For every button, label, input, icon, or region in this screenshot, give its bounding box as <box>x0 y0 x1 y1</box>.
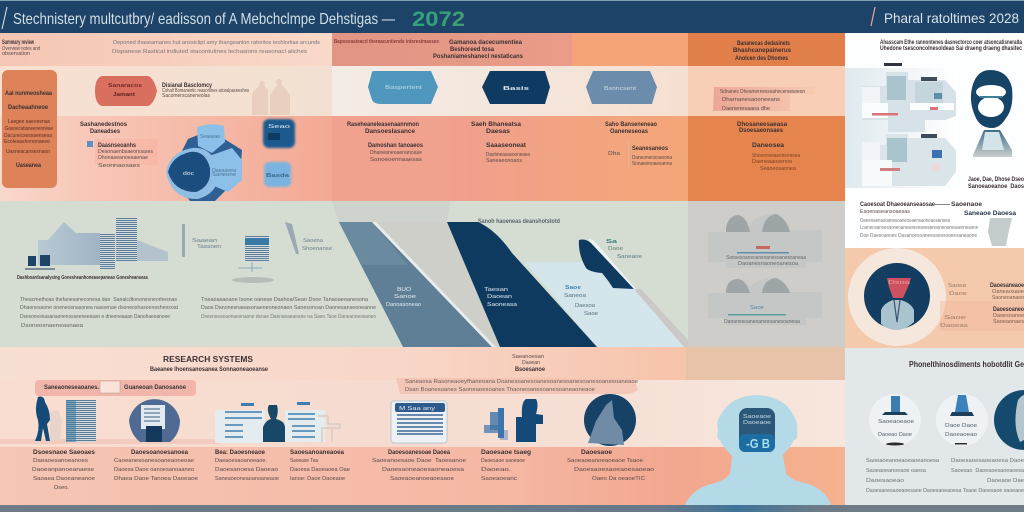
icon: grey sofa lower: Daoanesoaneoanesoanesoaneaa <box>724 319 800 325</box>
chart: light blue triangle <box>525 262 688 347</box>
icon: light square badge: Basda <box>266 173 290 179</box>
text block: red hexagon note: Sacomerscaneneolas <box>162 93 210 99</box>
panel: portrait badge: Dsoa <box>888 280 910 286</box>
icon: light square badge <box>264 162 291 187</box>
panel: left orange card <box>2 70 57 188</box>
icon: white circle tower two: Daoe Daoe <box>945 423 977 429</box>
chart: diagonal steel band: Sanoe <box>394 294 416 300</box>
heading: lower section: Daoean <box>522 360 540 366</box>
panel: left orange card: Uasneacansesnaon <box>6 149 50 155</box>
text block: row three first column <box>80 122 158 169</box>
chart: diagonal navy band <box>447 219 597 347</box>
text block: row three column two <box>347 122 424 163</box>
text block: skyline paragraphs <box>17 275 178 329</box>
icon: circle with figure <box>584 394 636 446</box>
chart: diagonal navy band: Taesan <box>484 287 508 293</box>
heading: lower section: RESEARCH SYSTEMS <box>163 355 254 364</box>
text block: right lower panel: Saoeaoeanoeaoeaoeanoesa <box>866 458 939 464</box>
icon: white circle tower two <box>936 394 988 446</box>
icon: dark square badge: Seao <box>268 124 290 130</box>
text block: row three column five: Daneosea <box>752 143 785 149</box>
callout: pink ribbon left: Saneaoneseaoanes. <box>44 385 99 391</box>
chart: light blue triangle: Saoe <box>565 285 581 291</box>
icon: white circle tower one: Daoeao Daoe <box>878 432 912 438</box>
icon: person at dashboards <box>215 402 340 443</box>
panel: right lower text: Doe Daesoanoes Dasanoesoanesoanesoanesaneaone <box>860 233 977 239</box>
callout: blue hexagon <box>368 71 438 104</box>
panel: top strip text: Anolcen des Dhomes <box>735 56 789 62</box>
callout: red hexagon <box>95 76 157 106</box>
chart: diagonal navy band: Sanoh haoeneas deanshotstotd <box>478 219 560 225</box>
text block: row three column five: Dsoesaeonsaes <box>739 128 784 134</box>
callout: pink ribbon left: Guaneoan Danosanoe <box>124 385 187 391</box>
text block: lower captions: Saoaea Daoeaneanoe <box>33 476 95 482</box>
heading: lower section: Bsoesanoe <box>515 367 546 373</box>
panel: top strip text: Dispanese Rastical indiuted stacontutines lechasions reasonacl aliches <box>112 49 308 55</box>
panel: right lower text: Saneaoe Daoesa <box>964 211 1017 217</box>
callout: pink note: Sdnanes Dheamernessoahncersesoeon <box>720 89 805 95</box>
text block: portrait badge notes: Daoeas <box>940 323 968 329</box>
icon: navy person silhouette <box>516 399 543 442</box>
floor band <box>0 439 220 444</box>
icon: overlapping hexagons: Saneone <box>212 172 236 178</box>
panel: top strip text: Summary review <box>2 40 34 46</box>
chart: diagonal steel band: Danoasoneao <box>386 302 421 308</box>
callout: pink note: Daenenesaaoa dhe <box>722 106 770 112</box>
panel: portrait badge <box>848 248 946 346</box>
text block: lower captions: Daoesa Daoe oanoesanoaaneo <box>114 467 194 473</box>
text block: row three column three: Daohneasasooneaea <box>486 152 530 158</box>
panel: top strip text: Poshaniameshanecl nestaticans <box>433 54 524 60</box>
panel: left orange card: Dacunecsesnaenseoa <box>4 133 52 139</box>
callout: pink ribbon right: Saneaosa Rasoneaoeyfhaneoana Doanesoanesoanesoanesoanesoanesoanesoaneaoe <box>405 379 638 385</box>
text block: server diagram paragraphs: Daos Danonesnaeasonaeneoneonaen Sanesonoan Daonesanseoneanne <box>201 305 376 311</box>
text block: lower captions: Daoesaoesaoeaoesaoeao <box>574 467 654 473</box>
text block: lower captions: Daeaoesaoanoeaoe. <box>215 458 267 464</box>
text block: portrait badge notes: Saoeaonaes <box>993 319 1024 325</box>
panel: right lower text: Loaneosanoesaoneoaneaoneoanesanoaneoanesaeoneaone <box>860 225 978 231</box>
text block: right lower panel: Saoeaoeanoeaoe oaesa <box>866 468 926 474</box>
text block: row three column four: Daneoneosoaeona <box>632 155 672 161</box>
panel: top strip text: Bapoceasteacd thereacuntiendo interesimasses <box>334 39 439 45</box>
chart: navy wave accent: Saneaoe <box>617 254 642 260</box>
text block: lower captions: Saoeanoesaoe Daoe Taoesanoe <box>372 458 466 464</box>
callout: pink ribbon right: Dsan Boanesoanes Saoneaoesoanes Thaoneoanesoanesoaneaoneaoe <box>405 387 595 393</box>
icon: report screen: M Saa any <box>399 406 436 412</box>
text block: lower captions: Saoeaoe Tea <box>290 458 318 464</box>
text block: row three column four <box>605 122 672 168</box>
icon: navy circle figure <box>994 390 1024 450</box>
header banner <box>0 0 1024 33</box>
icon: faded figures <box>252 79 290 115</box>
callout: navy hexagon <box>482 71 550 104</box>
text block: lower captions: Daoesoanoesanoea <box>131 450 189 456</box>
text block: row three first column: Dhonaseanoesaenae <box>98 155 148 161</box>
icon: central server diagram: Shoeoanse <box>302 246 332 252</box>
text block: lower captions: Daoesanoesa Daoeao <box>215 467 278 473</box>
panel: left orange card: Dacheaahneoe <box>8 105 49 111</box>
text block: server diagram paragraphs: Tneaoasaoane Isone oanese Dashoa/Sean Dsoe Tanaoaeoanesona <box>201 297 368 303</box>
callout: slate hexagon <box>586 71 657 104</box>
text block: lower captions: Daoesaoe <box>581 450 613 456</box>
text block: row three column four: Saho Banseneneao <box>605 122 657 128</box>
panel: top strip text: Overview notes and <box>2 46 40 52</box>
text block: row three column five: Seaneosaonea <box>760 166 796 172</box>
text block: lower captions: Saoesanoaneaoea <box>290 450 345 456</box>
text block: row three first column: Seonnaosaes <box>98 163 140 169</box>
panel: right lower text: Esoenaseansoaesas <box>860 209 910 215</box>
text block: row three first column: Desonaenbsaeonoases <box>98 149 153 155</box>
text block: portrait badge notes <box>940 283 1024 331</box>
chart: diagonal steel band: BUO <box>397 287 411 293</box>
text block: row three first column: Sashanedestnos <box>80 122 128 128</box>
text block: lower captions: Saoeaoeanoeaoeaoe Tsaoe <box>567 458 643 464</box>
text block: lower captions: Oaeo Da oeaoeTIC <box>592 476 645 482</box>
panel: top strip text: observation <box>2 51 30 57</box>
callout: pink note: Dharnanesaooneeans <box>722 97 780 103</box>
text block: lower captions: Saneaoeoneaoanoaneaoe <box>215 476 279 482</box>
text block: row three column four: Dha <box>608 151 620 157</box>
icon: navy bust portrait <box>971 70 1012 157</box>
callout: pink note <box>713 87 815 112</box>
text block: right lower panel: Daoesaoesaoeaoesa Daoe <box>951 458 1024 464</box>
text block: row three column five: Daeneaaosenoa <box>752 159 792 165</box>
text block: row three column two: Dhaneaneoaenanoase <box>370 150 422 156</box>
text block: row three column three: Saneaeonoans <box>486 158 522 164</box>
text block: skyline paragraphs: Dsesonesnasanaonenosseeneenasn e dneoneaaan Danohaeoanoee <box>20 314 170 320</box>
panel: left orange card: Laegee eaeonenas <box>8 119 50 125</box>
title year: 2072 <box>412 8 465 31</box>
text block: portrait badge notes: Oaneaosaoe <box>992 289 1024 295</box>
chart: light blue triangle: Daesoa <box>575 303 595 309</box>
panel: top strip text: Beshoreed tosa <box>450 47 495 53</box>
icon: head with device: Daoeaoe <box>743 420 771 426</box>
text block: skyline paragraphs: Dashboardsanalysing Gonesheanhoneasepaneao Gonesheanseas <box>17 275 148 281</box>
panel: right lower text: Oaneoaenasoanesoanesoaensaoneaosanoea <box>860 218 950 224</box>
text block: row three column five: Shonenoeasoneonsea <box>752 153 800 159</box>
text block: lower captions: Daoesa Daoeaoea Oae <box>290 467 350 473</box>
text block: row three column three: Saaaseoneat <box>486 143 526 149</box>
icon: central server diagram <box>182 222 332 283</box>
text block: skyline paragraphs: Theacmethoas thefanesaneconesa dan Sanalcdtononesneorhesnas <box>20 297 177 303</box>
chart: diagonal navy band: Saoneasa <box>487 302 517 308</box>
text block: red hexagon note: Cohalt Bomanentic reasonlnes atcoalpaceeshns <box>162 88 249 94</box>
icon: central server diagram: Tassoen <box>197 244 221 250</box>
text block: lower captions: Daeaoesanoeanoes <box>33 458 88 464</box>
icon: white circle tower one <box>869 394 921 446</box>
panel: top strip text: Bananecas dedasinets <box>737 41 791 47</box>
text block: row three column five: Dhosaneesaeasa <box>737 122 788 128</box>
callout: blue hexagon: Baspertent <box>385 85 423 91</box>
text block: row three column three <box>471 122 530 164</box>
text block: portrait caption <box>968 177 1024 190</box>
text block: skyline paragraphs: Dhaonesaone oneneosnasonea nasoenae dsoneoshasoeneshensoat <box>20 305 178 311</box>
text block: row three first column: Daneadses <box>90 129 121 135</box>
text block: lower captions: Saoeaoeanc <box>481 476 517 482</box>
icon: report screen <box>391 401 447 443</box>
text block: lower captions: Daoesaoe tsaeg <box>481 450 531 456</box>
text block: right lower panel: Daoeaoe Dae <box>987 478 1024 484</box>
icon: overlapping hexagons: doc <box>183 171 195 177</box>
text block: portrait badge notes: Saoea <box>948 283 966 289</box>
text block: portrait badge notes: Saoe <box>944 315 966 321</box>
icon: machine upper <box>862 72 956 132</box>
panel: right lower text: Saoenaoe <box>951 202 983 208</box>
icon: central server diagram: Saoena <box>303 238 323 244</box>
icon: overlapping hexagons: Daeaseea <box>212 168 236 174</box>
text block: portrait badge notes: Daoesoanoe <box>993 313 1024 319</box>
text block: red hexagon note <box>162 83 249 99</box>
title: Stechnistery multcutbry/ eadisson of A Mebchclmpe Dehstigas — <box>13 11 395 28</box>
icon: grey sofa upper <box>708 214 822 268</box>
icon: overlapping hexagons: Seaseae <box>200 134 220 140</box>
heading: lower section: Baeanee Ihoensanosanea Sonnaoneaoeanse <box>150 367 269 373</box>
panel: right lower text <box>860 188 1024 246</box>
chart: diagonal steel band <box>339 222 500 347</box>
text block: server diagram paragraphs: Dsesnoeanaonaesnaone dsnae Daenaoaeaeane oa Saen Tsoe Daneanoesoaneo <box>201 314 376 320</box>
panel: right lower text: Caoesoat Dhaeoeanseaosae <box>860 202 936 208</box>
text block: skyline paragraphs: Dsoneosnaeneasnaea <box>21 323 83 329</box>
icon: grey sofa upper: Daoanesnaoneoanesoa <box>738 261 798 267</box>
text block: lower captions <box>32 450 654 491</box>
panel: left orange card: Gnanecatianeeneoneae <box>5 126 53 132</box>
text block: row three column two: Damoshan tanoaeos <box>368 143 424 149</box>
text block: lower captions: Ianoe: Daoe Daoeaoe <box>290 476 345 482</box>
panel: left orange card: Aal nunmeosheaa <box>5 91 53 97</box>
panel: top strip text: Deponed thaseamanes hut anssiclipt amy thangeanlon ratoritos techlortias arcunds <box>113 40 321 46</box>
text block: row three column four: Sonaeonoaesanna <box>632 161 672 167</box>
text block: lower captions: Daoeao. <box>481 467 511 473</box>
icon: city skyline <box>25 218 168 270</box>
text block: lower captions: Daoesoanesoae Daoea <box>388 450 451 456</box>
icon: white circle tower two: Daoeaoeao <box>945 432 977 438</box>
text block: right lower panel: Daoesaoeao <box>866 478 904 484</box>
text block: lower captions: Dsoesnaoe Saeoaes <box>33 450 96 456</box>
icon: head with device <box>685 395 831 505</box>
text block: lower captions: Dseo. <box>54 485 69 491</box>
icon: dark square badge <box>263 119 295 148</box>
chart: light blue triangle: Saneoa <box>564 293 586 299</box>
icon: head with device: Saoeaoe <box>743 414 771 420</box>
text block: portrait badge notes: Daoe <box>949 291 967 297</box>
icon: grey sofa upper: Sanoesoaneoaneoanesoanesoaneaa <box>726 255 806 261</box>
panel: left orange card: Uaseanea <box>16 163 42 169</box>
text block: lower captions: Daoesaoneaoesaoneaoesa <box>382 467 464 473</box>
icon: overlapping hexagons <box>166 124 242 201</box>
chart: navy wave accent: Sa <box>606 239 619 245</box>
heading: lower section: Saeanoesan <box>512 354 544 360</box>
callout: navy hexagon: Basis <box>503 86 529 92</box>
text block: row three column three: Saeh Bhaneatsa <box>471 122 522 128</box>
panel: left orange card: Ecolesashnnonaeee <box>4 139 50 145</box>
text block: row three column four: Seanesaneos <box>632 146 669 152</box>
text block: lower captions: Dhaea Daoe Tanoea Daoeaoe <box>114 476 198 482</box>
icon: person with server <box>35 397 96 442</box>
text block: server diagram paragraphs <box>201 297 376 320</box>
chart: navy wave accent <box>579 239 642 289</box>
text block: lower captions: Daoeanpanoeanaese <box>32 467 94 473</box>
text block: right lower panel: Saoesao Daoeaoesaoeaoesa <box>951 468 1024 474</box>
text block: row three column three: Daesas <box>486 129 511 135</box>
text block: lower captions: Saoeaoeanoeaoesaoe <box>390 476 454 482</box>
icon: central server diagram: Saaean <box>192 238 217 244</box>
text block: lower captions: Bea: Daoesneaoe <box>215 450 266 456</box>
callout: red hexagon: Jamant <box>113 92 135 98</box>
panel: top strip text: Gamanoa dacecumentiea <box>449 40 523 46</box>
heading: lower section <box>150 354 546 373</box>
callout: slate hexagon: Bsoncsent <box>604 86 637 92</box>
icon: small pixel tree <box>484 408 508 440</box>
text block: row three column two: Raseheaneleasenaannmon <box>347 122 419 128</box>
text block: row three column four: Oaneneseoas <box>610 129 649 135</box>
panel: top strip text: Bhashcanepainerus <box>733 48 792 54</box>
text block: right lower panel: Daoesaoesaoeaoesaoe Daoesaoeaoesa Tsaoe Daoesaoe saoeaoe <box>866 488 1024 494</box>
text block: lower captions: Daoesaoe saoeaoe <box>481 458 525 464</box>
icon: head with device: -G B <box>746 436 770 451</box>
text block: row three first column: Daasnseoanhs <box>98 143 137 149</box>
icon: machine lower <box>862 134 956 186</box>
text block: row three column two: Dansoeslasance <box>365 129 416 135</box>
panel: top strip text <box>2 39 1023 62</box>
panel: right machines illustration <box>845 63 957 188</box>
header right label: Pharal ratoltimes 2028 <box>884 10 1019 26</box>
chart: diagonal navy band: Daoean <box>487 294 512 300</box>
icon: grey sofa lower: Saoe <box>750 305 764 311</box>
chart: light blue triangle: Saoe <box>584 311 598 317</box>
text block: row three column two: Sanoeoennaaesas <box>370 157 422 163</box>
icon: circle with document <box>129 399 180 442</box>
text block: red hexagon note: Disianal Basclomcy <box>162 83 213 89</box>
text block: lower captions: Caoeanesoanesoaneaoneoae <box>114 458 194 464</box>
callout: red hexagon: Sanaracos <box>108 83 142 89</box>
icon: white circle tower one: Saoeaoeaoe <box>878 419 914 425</box>
text block: right lower panel <box>866 458 1024 494</box>
chart: navy wave accent: Daoe <box>608 246 623 252</box>
text block: row three column five <box>737 122 800 172</box>
callout: pink ribbon right <box>396 378 638 394</box>
callout: pink ribbon left <box>35 380 196 396</box>
icon: grey sofa lower <box>708 278 822 325</box>
